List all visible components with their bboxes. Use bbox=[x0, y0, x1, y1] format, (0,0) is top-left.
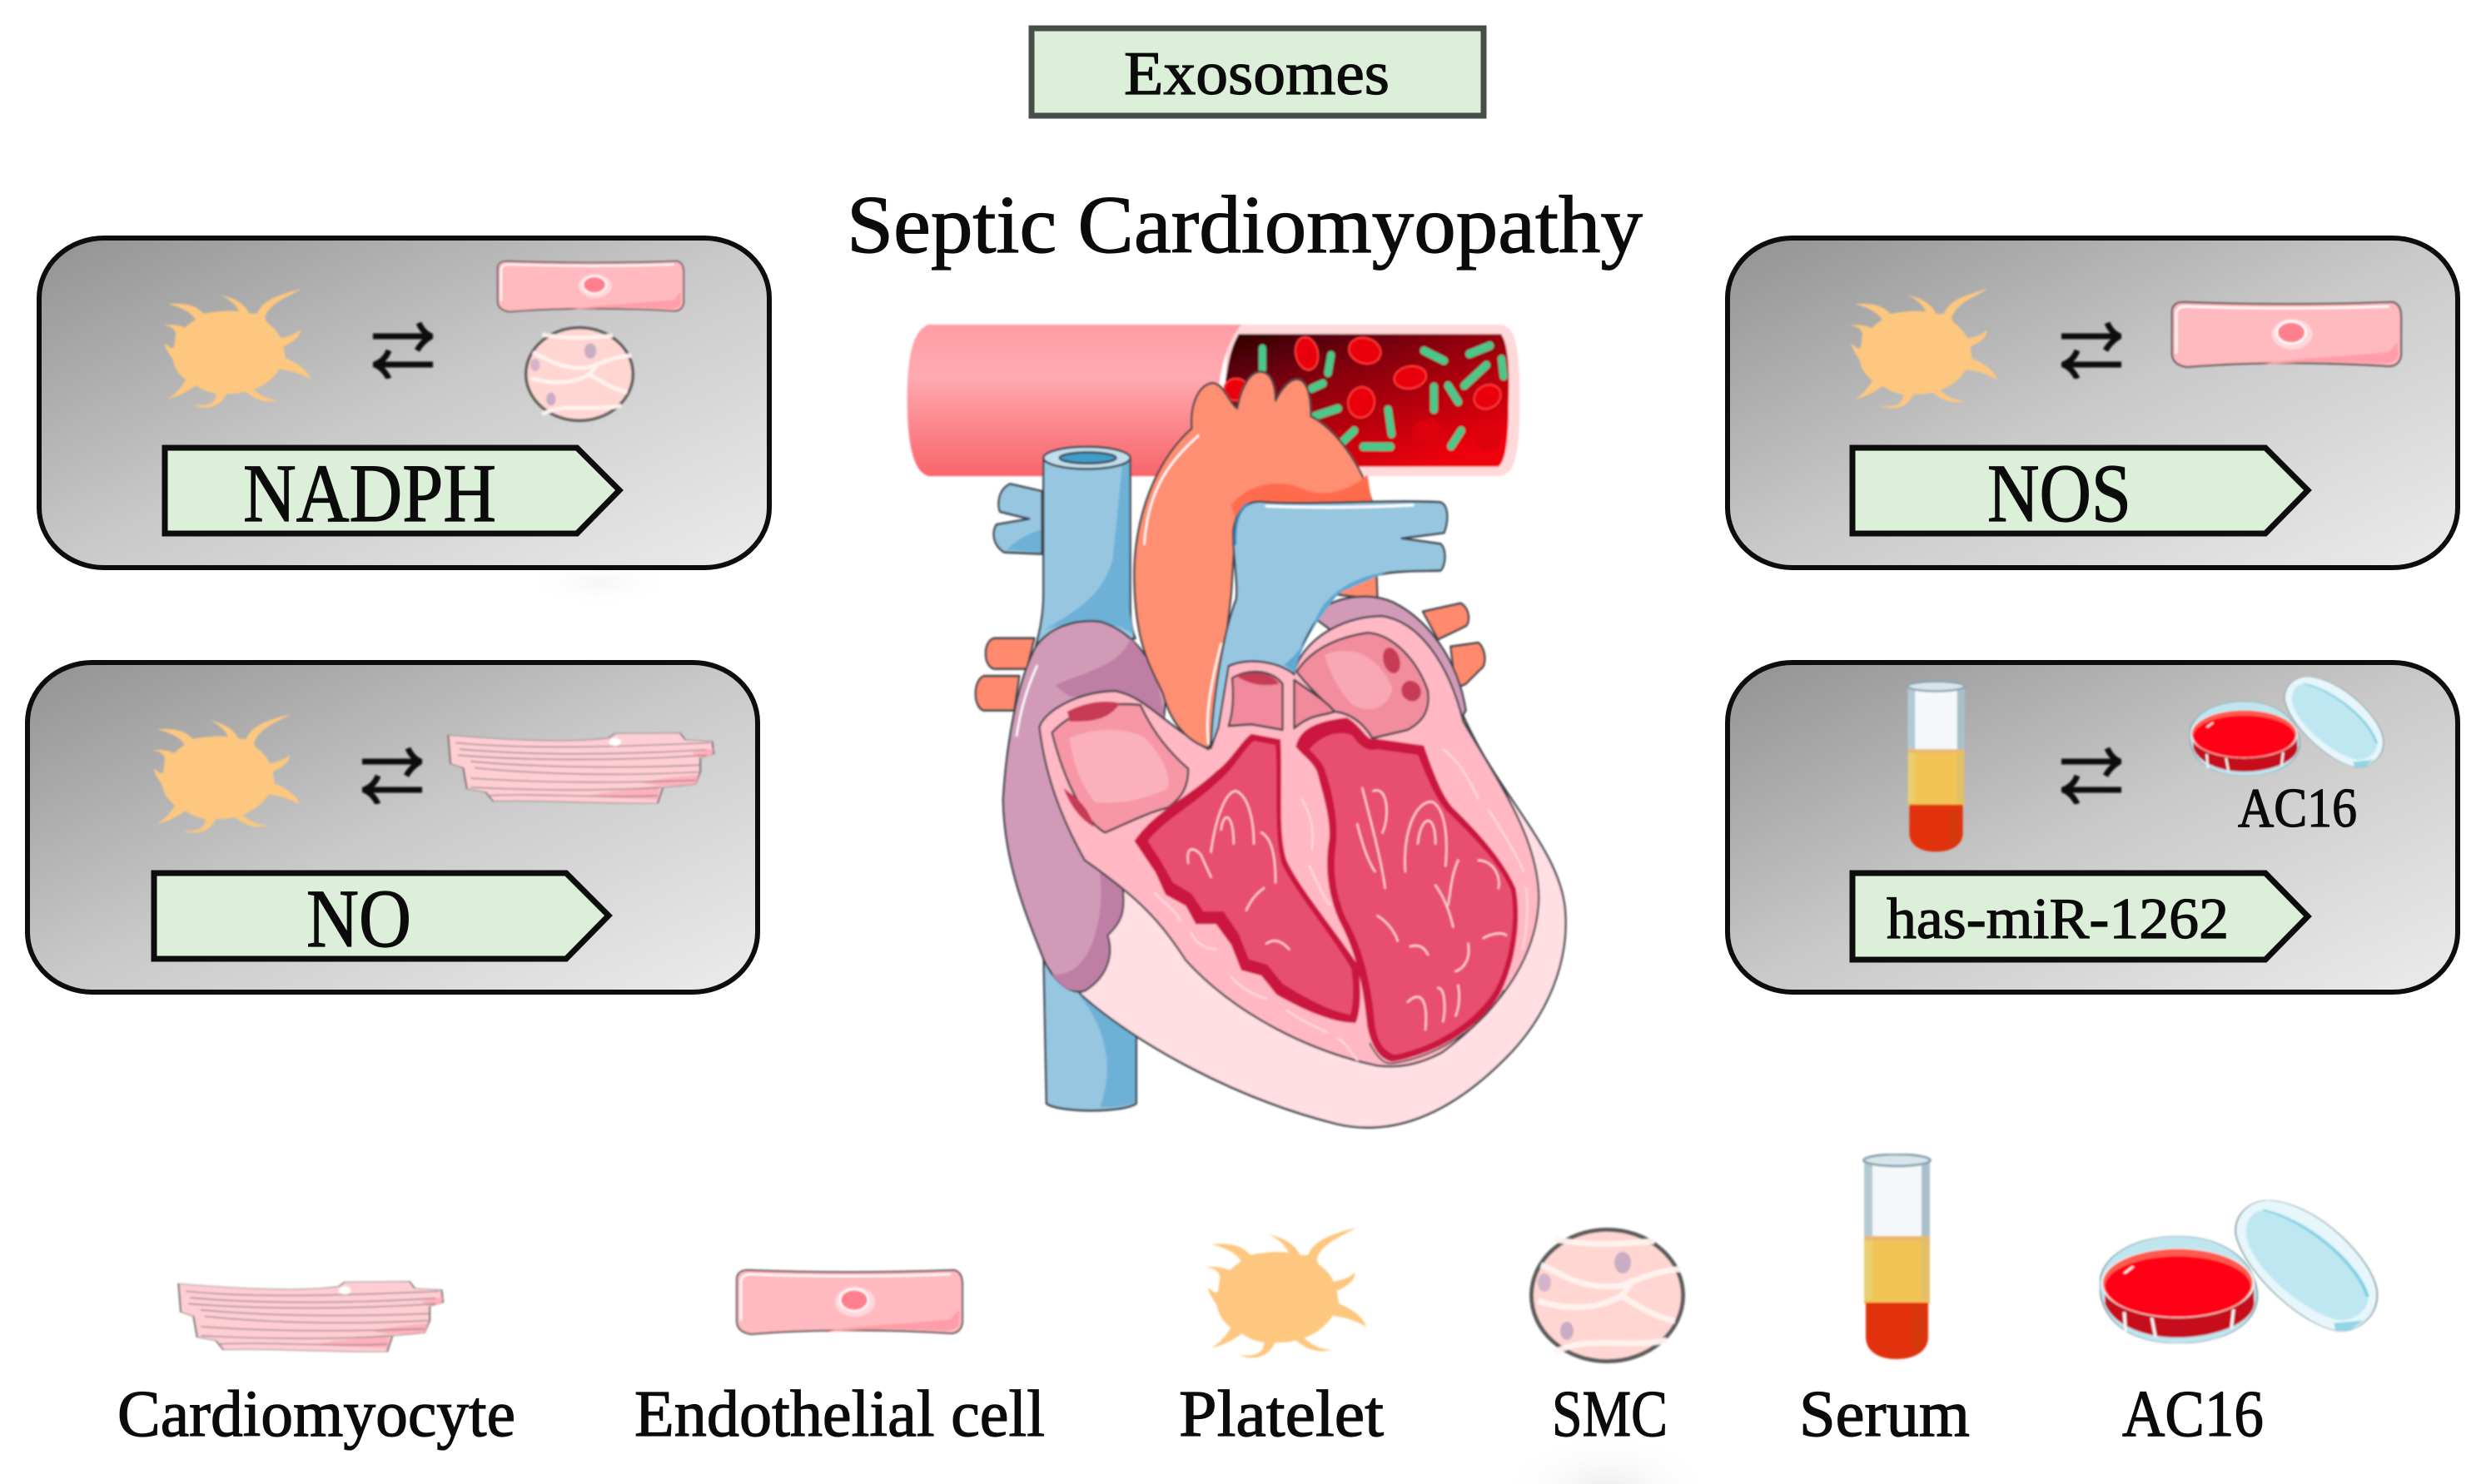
legend: AC16 bbox=[2100, 1200, 2377, 1451]
myocardium texture bbox=[1156, 749, 1527, 1060]
blood vessel with bacteria and red blood cells bbox=[907, 325, 1519, 476]
right atrium chamber bbox=[1052, 702, 1188, 832]
superior vena cava bbox=[994, 447, 1136, 653]
left atrium chamber bbox=[1297, 633, 1429, 738]
legend: endothelial cell: Endothelial cell bbox=[634, 1378, 1045, 1451]
arrow label: NO: NO bbox=[306, 872, 411, 965]
legend: cardiomyocyte: Cardiomyocyte bbox=[117, 1378, 515, 1451]
arrow label: NADPH: NADPH bbox=[243, 447, 496, 539]
arrow label: has-miR-1262 bbox=[1852, 873, 2308, 960]
header box: Exosomes: Exosomes bbox=[1124, 40, 1390, 108]
heart outer wall bbox=[1080, 672, 1566, 1128]
left ventricle bbox=[1295, 717, 1518, 1064]
panel: NOS platelet and endothelial bbox=[1728, 238, 2458, 568]
heart valves bbox=[1229, 672, 1335, 730]
legend: AC16: AC16 bbox=[2122, 1378, 2264, 1451]
aorta bbox=[1134, 372, 1371, 748]
pulmonary artery bbox=[1211, 502, 1447, 748]
panel: has-miR-1262 serum and AC16 bbox=[1728, 663, 2458, 992]
header box: Exosomes bbox=[1032, 28, 1484, 116]
legend: SMC: SMC bbox=[1552, 1378, 1668, 1451]
legend: SMC bbox=[1532, 1230, 1683, 1451]
legend: platelet: Platelet bbox=[1179, 1378, 1384, 1451]
right ventricle bbox=[1134, 734, 1360, 1023]
legend: platelet bbox=[1179, 1228, 1384, 1451]
arrow label: NOS: NOS bbox=[1987, 447, 2131, 539]
legend: endothelial cell bbox=[634, 1270, 1045, 1451]
arrow label: NOS bbox=[1852, 447, 2308, 539]
legend: cardiomyocyte bbox=[117, 1282, 515, 1451]
arrow label: NADPH bbox=[165, 447, 619, 539]
right atrium bbox=[1003, 621, 1166, 992]
panel: NADPH platelet and endothelial / SMC bbox=[39, 238, 769, 568]
legend: serum: Serum bbox=[1799, 1378, 1970, 1451]
arrow label: has-miR-1262: has-miR-1262 bbox=[1887, 887, 2229, 951]
inferior vena cava bbox=[1043, 949, 1136, 1110]
title: Septic Cardiomyopathy bbox=[847, 180, 1643, 270]
legend: serum bbox=[1799, 1154, 1970, 1451]
panel: NO platelet and cardiomyocyte bbox=[27, 663, 758, 992]
left atrium outer cap bbox=[1312, 597, 1466, 732]
aorta rear segment bbox=[1332, 572, 1377, 599]
heart and septic blood vessel illustration bbox=[907, 325, 1566, 1128]
label: AC16 in panel: AC16 bbox=[2238, 777, 2357, 839]
myocardium wall bbox=[1039, 616, 1539, 1066]
arrow label: NO bbox=[154, 872, 609, 965]
pulmonary veins bbox=[976, 603, 1484, 711]
